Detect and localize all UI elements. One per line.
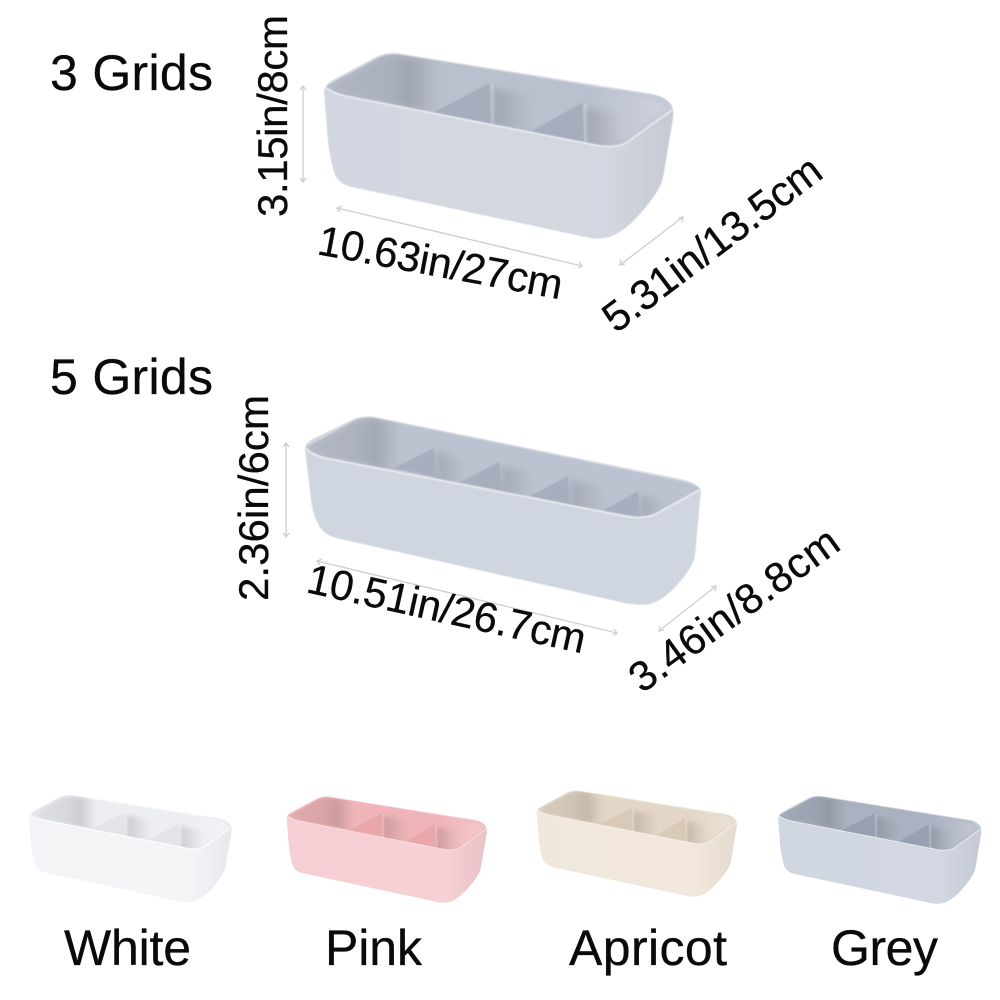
label: 5-grid width: 3.46in/8.8cm (620, 517, 848, 701)
label: 5-grid height: 2.36in/6cm (230, 395, 277, 601)
arrow: 3-grid length (337, 206, 582, 268)
label: 5-grid length: 10.51in/26.7cm (303, 555, 590, 662)
panel: 3-grid organiser product (324, 53, 673, 239)
label: 3-grid height: 3.15in/8cm (249, 15, 296, 217)
heading: 3 Grids: 3 Grids (50, 45, 213, 101)
heading: 5 Grids: 5 Grids (50, 349, 213, 405)
colour label: White: White (64, 920, 191, 976)
arrow: 3-grid width (620, 217, 683, 265)
product: pink organiser (287, 796, 487, 903)
label: 3-grid width: 5.31in/13.5cm (593, 146, 831, 341)
arrow: 3-grid height (300, 86, 306, 182)
arrow: 5-grid height (283, 443, 289, 537)
product: white organiser (29, 795, 232, 902)
arrow: 5-grid width (659, 586, 716, 631)
colour label: Pink: Pink (325, 920, 423, 976)
colour label: Grey: Grey (831, 920, 938, 976)
arrow: 5-grid length (317, 559, 617, 635)
label: 3-grid length: 10.63in/27cm (314, 217, 567, 308)
panel: 5-grid organiser product (305, 416, 701, 605)
colour label: Apricot: Apricot (569, 920, 727, 976)
product: grey organiser (778, 796, 981, 904)
product: apricot organiser (537, 790, 737, 897)
